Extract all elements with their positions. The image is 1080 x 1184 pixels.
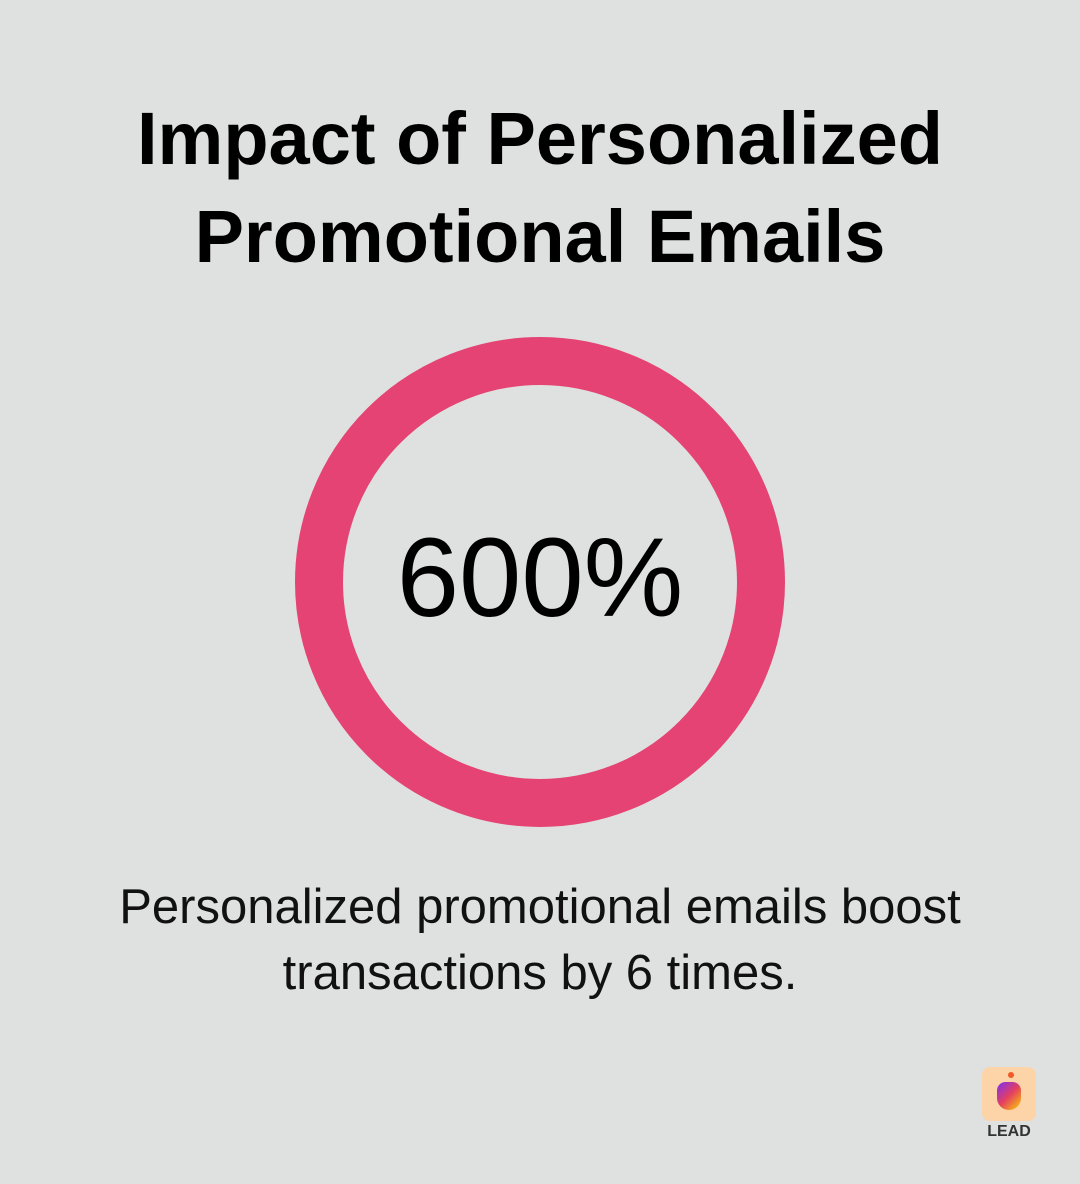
- logo: [982, 1067, 1036, 1140]
- title: Impact of Personalized: [137, 97, 943, 180]
- logo: LEAD: [987, 1123, 1031, 1140]
- description: transactions by 6 times.: [283, 946, 797, 1000]
- ring chart: 600%: [397, 515, 683, 640]
- description: Personalized promotional emails boost: [119, 880, 961, 934]
- title: [137, 97, 943, 278]
- title: Promotional Emails: [195, 195, 885, 278]
- description: [119, 880, 961, 1000]
